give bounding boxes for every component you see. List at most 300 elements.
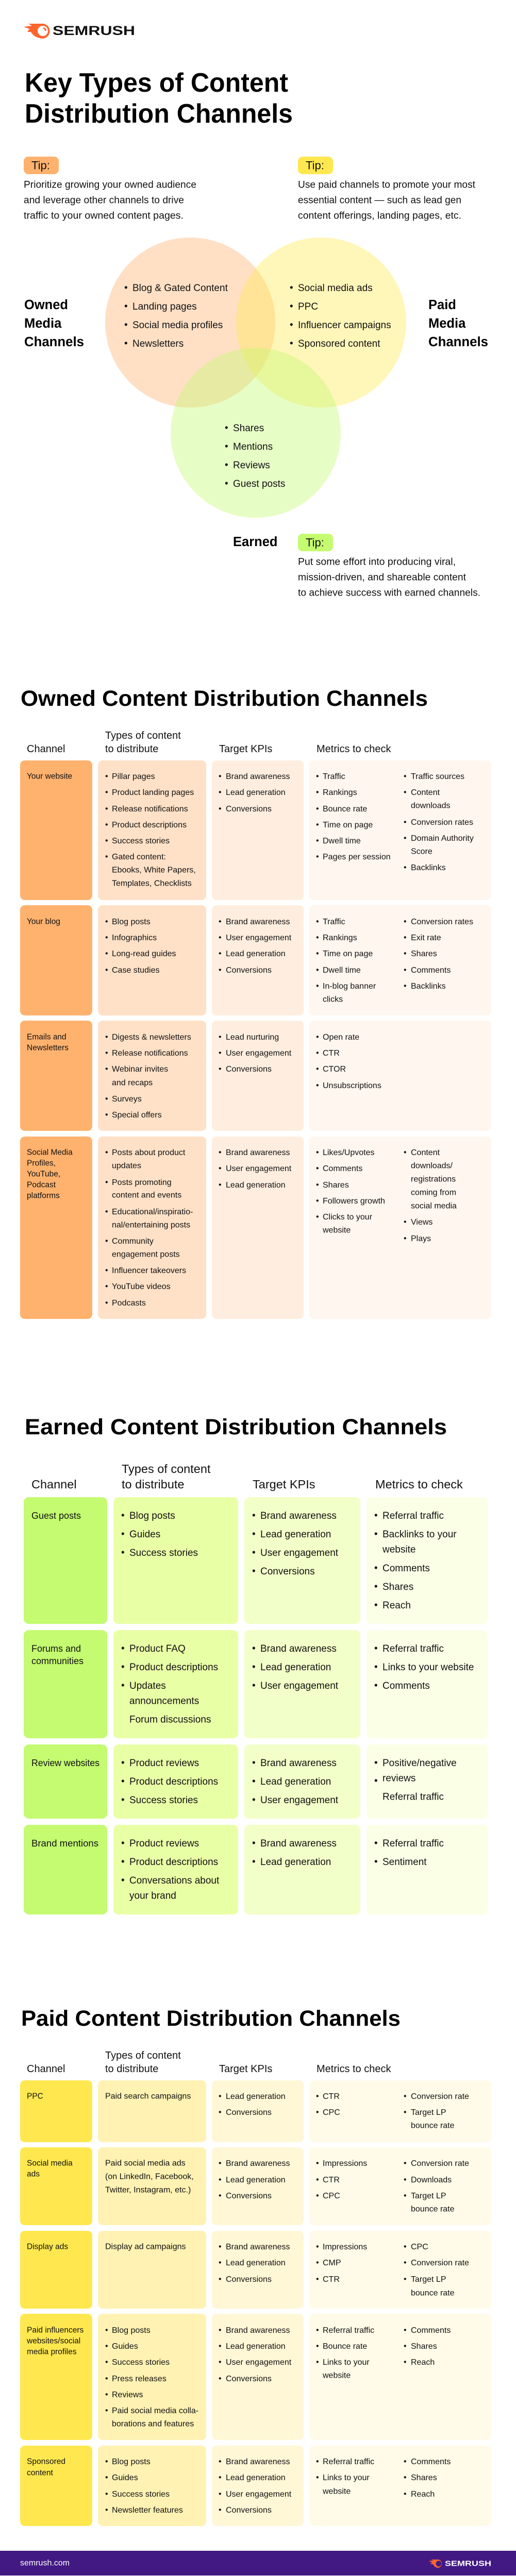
row: your website: Your website (27, 772, 72, 781)
row: social media profiles: Posts about product (112, 1148, 186, 1157)
list: paid media: Social media ads (298, 282, 373, 294)
venn diagram (105, 238, 406, 518)
row: paid influencers: • (105, 2342, 108, 2350)
row: brand mentions: your brand (129, 1891, 176, 1901)
title: Distribution Channels (25, 99, 293, 129)
row: your website: Release notifications (112, 805, 188, 813)
row: social media profiles: Brand awareness (226, 1148, 290, 1157)
row: guest posts: • (121, 1511, 125, 1521)
row: social media ads: Twitter, Instagram, etc.) (105, 2185, 191, 2195)
tip: owned: traffic to your owned content pages. (24, 210, 184, 222)
row: paid influencers: Paid social media colla- (112, 2406, 198, 2415)
row: sponsored content: Guides (112, 2473, 138, 2482)
row: sponsored content: • (219, 2489, 222, 2499)
row: your website: • (219, 772, 222, 781)
row: social media profiles: • (316, 1196, 319, 1206)
row: social media profiles: YouTube, (27, 1170, 60, 1179)
row: your website: • (105, 805, 108, 813)
list: paid media (290, 282, 391, 349)
row: display ads: • (219, 2259, 222, 2267)
row: forums and communities: Lead generation (260, 1662, 331, 1672)
row: your blog: Brand awareness (226, 917, 290, 926)
row: social media profiles: Comments (323, 1164, 362, 1173)
row: paid influencers: Lead generation (226, 2342, 286, 2350)
row: emails and newsletters: • (219, 1032, 222, 1042)
list: owned media: Newsletters (132, 338, 184, 349)
row: forums and communities (24, 1630, 488, 1738)
row: social media ads: Social media (27, 2159, 73, 2168)
row: social media ads: CTR (323, 2175, 340, 2184)
row: your blog: Dwell time (323, 965, 361, 975)
row: social media profiles: Podcasts (112, 1298, 146, 1308)
row: your website: Domain Authority (411, 834, 474, 843)
row: guest posts: • (374, 1600, 378, 1611)
row: your blog: Rankings (323, 934, 357, 942)
tip: earned: to achieve success with earned channels. (298, 587, 480, 599)
row: paid influencers: • (316, 2358, 319, 2367)
row: social media profiles: YouTube videos (112, 1282, 171, 1291)
row: paid influencers: • (219, 2374, 222, 2383)
tip: earned (298, 534, 480, 599)
row: forums and communities: • (374, 1643, 378, 1654)
row: sponsored content: • (105, 2458, 108, 2466)
tip: earned: mission-driven, and shareable content (298, 572, 467, 583)
row: your website: Ebooks, White Papers, (112, 866, 196, 875)
tip: owned: Prioritize growing your owned audience (24, 179, 196, 191)
row: sponsored content: Comments (411, 2458, 451, 2466)
row: your blog: Exit rate (411, 934, 441, 942)
row: emails and newsletters: • (219, 1049, 222, 1057)
row: forums and communities: Updates (129, 1681, 166, 1691)
row: your website: • (219, 788, 222, 796)
row: review websites: Product descriptions (129, 1776, 218, 1787)
row: social media profiles: • (105, 1148, 108, 1157)
row: social media profiles: Plays (411, 1234, 431, 1243)
list: earned media: Mentions (233, 441, 273, 452)
row: PPC: Target LP (411, 2108, 446, 2116)
row: social media profiles: • (105, 1208, 108, 1216)
row: your blog: User engagement (226, 934, 292, 942)
row: sponsored content: • (404, 2473, 407, 2482)
row: your website: • (316, 772, 319, 781)
row: social media profiles: User engagement (226, 1164, 292, 1173)
table header (27, 2050, 391, 2075)
row: your website: Product descriptions (112, 820, 187, 829)
row: sponsored content: • (105, 2506, 108, 2514)
row: your website: • (105, 772, 108, 781)
row: social media ads: ads (27, 2170, 40, 2178)
list: paid media: PPC (298, 301, 318, 312)
row: emails and newsletters: • (316, 1064, 319, 1074)
row: emails and newsletters: Surveys (112, 1094, 142, 1104)
row: social media ads: Target LP (411, 2192, 446, 2200)
row: paid influencers: Bounce rate (323, 2342, 367, 2350)
row: guest posts: Conversions (260, 1566, 315, 1577)
row: your website: Pages per session (323, 852, 391, 861)
row: your website: • (316, 837, 319, 845)
row: review websites: • (121, 1758, 125, 1768)
list: earned media (225, 422, 285, 489)
row: sponsored content: • (404, 2458, 407, 2466)
row: display ads: • (219, 2242, 222, 2251)
footer logo (429, 2560, 491, 2568)
row: brand mentions: Product descriptions (129, 1857, 218, 1867)
row: your website: • (316, 820, 319, 829)
row: sponsored content: Newsletter features (112, 2506, 183, 2514)
list: earned media: • (225, 460, 228, 471)
logo: Semrush (24, 24, 135, 39)
row: your blog: Comments (411, 965, 451, 975)
row: your blog: Lead generation (226, 949, 286, 958)
row: paid influencers: • (105, 2391, 108, 2399)
row: sponsored content: • (316, 2458, 319, 2466)
row: your website: • (316, 852, 319, 861)
row: guest posts: Lead generation (260, 1529, 331, 1539)
row: your website: • (105, 852, 108, 861)
row: paid influencers: Press releases (112, 2374, 167, 2383)
row: sponsored content: Reach (411, 2489, 435, 2499)
list: earned media: Guest posts (233, 478, 285, 489)
row: review websites: • (121, 1795, 125, 1805)
row: your website: Brand awareness (226, 772, 290, 781)
row: social media profiles: • (105, 1266, 108, 1275)
row: brand mentions: Sentiment (382, 1857, 427, 1867)
row: sponsored content: User engagement (226, 2489, 292, 2499)
circle: earned (171, 348, 341, 518)
row: social media ads: • (404, 2159, 407, 2168)
row: your blog: Shares (411, 949, 437, 958)
row: sponsored content: Referral traffic (323, 2458, 374, 2466)
list: earned media: • (225, 441, 228, 452)
row: paid influencers: • (105, 2358, 108, 2367)
row: guest posts: • (374, 1563, 378, 1573)
row: your blog: clicks (323, 995, 343, 1004)
table header: Target KPIs (219, 2063, 272, 2075)
row: social media profiles: • (105, 1282, 108, 1291)
table header: Types of content (105, 730, 181, 741)
row: social media ads: • (219, 2175, 222, 2184)
row: display ads: • (404, 2275, 407, 2283)
row: display ads: CMP (323, 2259, 341, 2267)
row: brand mentions: Lead generation (260, 1857, 331, 1867)
row: social media profiles: Shares (323, 1181, 349, 1189)
row: your blog: • (404, 934, 407, 942)
table header: to distribute (105, 743, 158, 755)
label: paid media channels: Media (428, 316, 466, 331)
row: sponsored content: • (105, 2489, 108, 2499)
row: your website: • (404, 772, 407, 781)
row: your website: Bounce rate (323, 805, 367, 813)
row: social media profiles: engagement posts (112, 1250, 180, 1259)
row: your blog: • (316, 965, 319, 975)
row: paid influencers: User engagement (226, 2358, 292, 2367)
row: PPC: PPC (27, 2092, 43, 2101)
row: brand mentions: • (121, 1838, 125, 1849)
row: paid influencers: • (219, 2342, 222, 2350)
list: paid media: • (290, 282, 293, 294)
row: review websites: Review websites (31, 1758, 99, 1768)
row: brand mentions: Brand mentions (31, 1838, 98, 1849)
row: forums and communities: • (121, 1643, 125, 1654)
row: paid influencers: Reach (411, 2358, 435, 2367)
row: social media ads: Paid social media ads (105, 2159, 186, 2168)
row: social media ads: Lead generation (226, 2175, 286, 2184)
row: social media profiles: coming from (411, 1188, 456, 1197)
row: your website: Rankings (323, 788, 357, 796)
row: social media profiles: Posts promoting (112, 1178, 172, 1187)
row: guest posts: Comments (382, 1563, 430, 1573)
row: guest posts: Backlinks to your (382, 1529, 457, 1539)
row: brand mentions (24, 1825, 488, 1914)
row: forums and communities: Product descriptions (129, 1662, 218, 1672)
row: social media profiles: Social Media (27, 1148, 73, 1157)
row: social media ads: • (316, 2159, 319, 2168)
row: forums and communities: • (121, 1681, 125, 1691)
list: owned media: Landing pages (132, 301, 197, 312)
row: your website: • (316, 788, 319, 796)
row: your blog: Backlinks (411, 982, 446, 990)
row: your blog: Blog posts (112, 917, 151, 926)
row: brand mentions: • (252, 1857, 256, 1867)
tip: paid: Use paid channels to promote your most (298, 179, 476, 191)
label: paid media channels (428, 298, 488, 349)
table: owned (20, 730, 491, 1319)
row: social media profiles: updates (112, 1161, 141, 1171)
row: brand mentions: • (374, 1857, 378, 1867)
row: your blog: Your blog (27, 917, 60, 926)
list: owned media: • (124, 282, 128, 294)
row: your website: Dwell time (323, 837, 361, 845)
row: guest posts: website (382, 1545, 415, 1555)
tip: earned: Tip: (306, 536, 324, 549)
row: social media profiles: nal/entertaining posts (112, 1221, 190, 1229)
row: your blog: • (219, 934, 222, 942)
row: your blog: • (404, 949, 407, 958)
row: emails and newsletters: Webinar invites (112, 1064, 168, 1074)
row: guest posts: Blog posts (129, 1511, 175, 1521)
row: emails and newsletters: • (105, 1111, 108, 1119)
row: your blog: • (316, 934, 319, 942)
row: social media ads: • (404, 2192, 407, 2200)
list: earned media: Reviews (233, 460, 270, 471)
row: social media profiles: • (105, 1298, 108, 1308)
row: forums and communities: Brand awareness (260, 1643, 337, 1654)
row: PPC (20, 2080, 491, 2142)
row: paid influencers: Reviews (112, 2391, 143, 2399)
row: brand mentions: • (374, 1838, 378, 1849)
row: your blog: Conversions (226, 965, 272, 975)
row: social media ads (20, 2147, 491, 2225)
row: social media ads: Conversion rate (411, 2159, 469, 2168)
tip: owned (24, 157, 196, 222)
row: your blog: Case studies (112, 965, 160, 975)
table header: Channel (27, 743, 65, 755)
heading: earned: Earned Content Distribution Channels (25, 1415, 447, 1439)
row: paid influencers: • (404, 2342, 407, 2350)
row: social media profiles: Lead generation (226, 1181, 286, 1189)
row: sponsored content: • (316, 2473, 319, 2482)
row: paid influencers: Shares (411, 2342, 437, 2350)
row: your blog: • (105, 934, 108, 942)
tip: earned: Put some effort into producing viral, (298, 556, 456, 568)
row: social media ads: (on LinkedIn, Facebook, (105, 2172, 194, 2181)
row: guest posts: User engagement (260, 1548, 339, 1558)
row: emails and newsletters: • (105, 1049, 108, 1057)
row: your website: Content (411, 788, 440, 796)
row: emails and newsletters: • (105, 1064, 108, 1074)
row: your website: Score (411, 847, 432, 856)
row: display ads: Lead generation (226, 2259, 286, 2267)
row: forums and communities: • (252, 1662, 256, 1672)
tip: owned: and leverage other channels to drive (24, 195, 184, 206)
row: forums and communities: Comments (382, 1681, 430, 1691)
row: paid influencers: • (404, 2326, 407, 2335)
row: forums and communities: Product FAQ (129, 1643, 186, 1654)
row: social media ads: • (404, 2175, 407, 2184)
row: display ads: Display ad campaigns (105, 2242, 186, 2251)
tip: paid: content offerings, landing pages, etc. (298, 210, 461, 222)
row: paid influencers: Paid influencers (27, 2326, 84, 2335)
row: social media profiles: downloads/ (411, 1161, 453, 1171)
row: your website: Traffic sources (411, 772, 464, 781)
row: guest posts: • (121, 1529, 125, 1539)
row: your website: • (105, 837, 108, 845)
label: earned: Earned (233, 535, 277, 549)
row: emails and newsletters: Digests & newsletters (112, 1032, 191, 1042)
row: emails and newsletters: • (105, 1094, 108, 1104)
row: your blog: Traffic (323, 917, 345, 926)
row: sponsored content: • (404, 2489, 407, 2499)
row: paid influencers: • (219, 2358, 222, 2367)
row: your blog: • (105, 917, 108, 926)
row: paid influencers: Blog posts (112, 2326, 151, 2335)
tip: paid: essential content — such as lead gen (298, 195, 461, 206)
row: social media profiles: • (316, 1164, 319, 1173)
row: paid influencers: • (316, 2342, 319, 2350)
row: guest posts: Guides (129, 1529, 160, 1539)
row: review websites: Referral traffic (382, 1792, 444, 1802)
row: social media ads: CPC (323, 2192, 340, 2200)
row: review websites: • (252, 1776, 256, 1787)
row: brand mentions: • (252, 1838, 256, 1849)
list: earned media: • (225, 422, 228, 434)
row: social media profiles: Podcast (27, 1181, 56, 1189)
row: your website: • (316, 805, 319, 813)
row: guest posts: • (374, 1511, 378, 1521)
row: social media ads: Impressions (323, 2159, 367, 2168)
row: social media profiles: • (219, 1164, 222, 1173)
row: your blog: Conversion rates (411, 917, 473, 926)
row: forums and communities: • (252, 1643, 256, 1654)
row: social media profiles: • (404, 1218, 407, 1226)
row: your website: Time on page (323, 820, 373, 829)
list: owned media: • (124, 338, 128, 349)
row: display ads (20, 2231, 491, 2309)
row: forums and communities: • (121, 1662, 125, 1672)
row: review websites: Product reviews (129, 1758, 199, 1768)
row: sponsored content: Conversions (226, 2506, 272, 2514)
row: guest posts: Guest posts (31, 1511, 81, 1521)
footer (0, 2551, 516, 2575)
table header: Target KPIs (253, 1478, 315, 1491)
row: PPC: bounce rate (411, 2122, 455, 2130)
row: review websites: • (121, 1776, 125, 1787)
row: sponsored content: Shares (411, 2473, 437, 2482)
row: display ads: bounce rate (411, 2289, 455, 2298)
row: review websites: Success stories (129, 1795, 198, 1805)
list: owned media: Social media profiles (132, 319, 223, 331)
row: emails and newsletters: CTR (323, 1049, 340, 1057)
row: social media profiles: Likes/Upvotes (323, 1148, 374, 1157)
list: paid media: Sponsored content (298, 338, 380, 349)
row: display ads: • (219, 2275, 222, 2283)
row: your website: Backlinks (411, 863, 446, 872)
row: social media profiles: registrations (411, 1175, 456, 1184)
tip: paid: Tip: (306, 159, 324, 172)
table header (31, 1462, 463, 1491)
list: owned media: Blog & Gated Content (132, 282, 228, 294)
row: social media ads: • (316, 2192, 319, 2200)
row: guest posts (24, 1497, 488, 1624)
table header: Types of content (122, 1462, 211, 1476)
row: social media profiles: • (316, 1213, 319, 1221)
row: paid influencers: Guides (112, 2342, 138, 2350)
row: emails and newsletters: Special offers (112, 1111, 162, 1119)
row: social media profiles: • (404, 1234, 407, 1243)
table: earned (24, 1462, 488, 1914)
row: paid influencers: • (105, 2326, 108, 2335)
row: your website: • (105, 788, 108, 796)
row: emails and newsletters: Open rate (323, 1032, 359, 1042)
row: guest posts: Success stories (129, 1548, 198, 1558)
row: PPC: Conversions (226, 2108, 272, 2116)
row: social media profiles: Influencer takeovers (112, 1266, 186, 1275)
row: forums and communities: Forum discussions (129, 1715, 211, 1725)
row: paid influencers: • (105, 2374, 108, 2383)
row: emails and newsletters (20, 1021, 491, 1131)
row: guest posts: Reach (382, 1600, 411, 1611)
row: your website: Templates, Checklists (112, 879, 192, 888)
list: paid media: • (290, 301, 293, 312)
row: brand mentions: Product reviews (129, 1838, 199, 1849)
row: guest posts: Referral traffic (382, 1511, 444, 1521)
row: social media profiles: Educational/inspiratio- (112, 1208, 193, 1216)
row: social media profiles: • (219, 1181, 222, 1189)
row: PPC: CTR (323, 2092, 340, 2101)
table header: Channel (31, 1478, 77, 1491)
row: your blog: Infographics (112, 934, 157, 942)
row: guest posts: • (252, 1548, 256, 1558)
row: review websites: • (374, 1758, 378, 1768)
heading: paid: Paid Content Distribution Channels (21, 2006, 401, 2031)
row: forums and communities: • (374, 1681, 378, 1691)
row: paid influencers: Links to your (323, 2358, 370, 2367)
row: your blog: • (105, 949, 108, 958)
row: review websites: Lead generation (260, 1776, 331, 1787)
row: emails and newsletters: • (316, 1049, 319, 1057)
logo: Semrush: SEMRUSH (53, 24, 135, 38)
row: PPC: • (404, 2108, 407, 2116)
row: emails and newsletters: • (219, 1064, 222, 1074)
footer: semrush.com (20, 2558, 70, 2568)
row: social media profiles: Views (411, 1218, 432, 1226)
row: display ads: Conversion rate (411, 2259, 469, 2267)
row: paid influencers: Referral traffic (323, 2326, 374, 2335)
table header: Metrics to check (317, 2063, 391, 2075)
row: forums and communities: announcements (129, 1696, 199, 1706)
row: your website: Conversion rates (411, 818, 473, 826)
row: sponsored content: Success stories (112, 2489, 170, 2499)
